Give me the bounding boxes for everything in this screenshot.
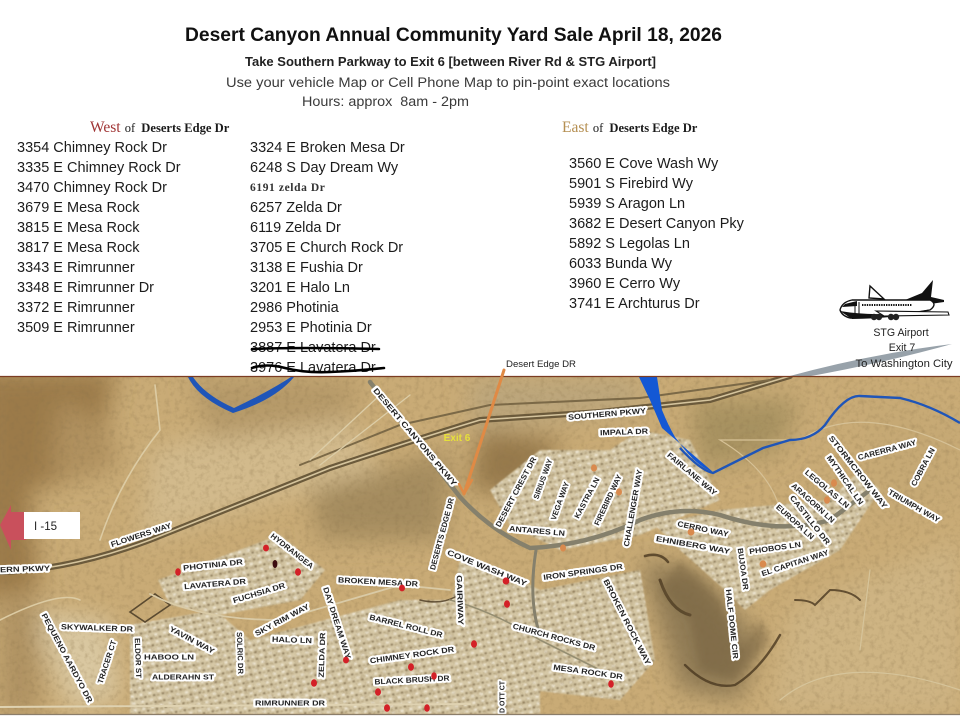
address list: west column 1	[17, 140, 181, 336]
airport label: Exit 7	[889, 342, 915, 354]
street labels: ZELDA DR	[317, 632, 327, 678]
address list: west column 2: 6119 Zelda Dr	[250, 220, 341, 236]
heading: west of Deserts Edge Dr: West of Deserts Edge Dr	[90, 119, 230, 136]
road: Desert Canyons Parkway	[0, 382, 960, 707]
street labels: TRACER CT	[96, 639, 118, 685]
street labels: RIMRUNNER DR	[255, 698, 326, 708]
address list: east: 5901 S Firebird Wy	[569, 176, 694, 192]
address list: west column 2: 6257 Zelda Dr	[250, 200, 342, 216]
street labels: CARERRA WAY	[857, 438, 917, 462]
street labels: ARAGORN LN	[790, 481, 836, 525]
street labels: FAIRLANE WAY	[665, 451, 719, 497]
address list: west column 1: 3343 E Rimrunner	[17, 260, 135, 276]
residential neighbourhoods	[130, 430, 880, 714]
airport label: To Washington City	[856, 358, 953, 370]
street labels: FUCHSIA DR	[232, 581, 287, 605]
street labels: HABOO LN	[144, 652, 194, 662]
street labels: STORMCROW WAY	[827, 434, 889, 510]
address list: west column 1: 3817 E Mesa Rock	[17, 240, 140, 256]
address list: west column 2: 3887 E Lavatera Dr	[250, 340, 376, 356]
address list: east: 3960 E Cerro Wy	[569, 276, 681, 292]
street labels: DAY DREAM WAY	[321, 586, 353, 660]
address list: east	[569, 156, 745, 312]
strike-through: cancelled addresses	[252, 348, 384, 372]
street labels: CHIMNEY ROCK DR	[369, 645, 455, 665]
address list: west column 1: 3348 E Rimrunner Dr	[17, 280, 154, 296]
arrow: Desert Edge DR to Exit 6	[459, 370, 504, 494]
address list: east: 3741 E Archturus Dr	[569, 296, 700, 312]
street labels: MESA ROCK DR	[553, 663, 624, 681]
address list: west column 1: 3509 E Rimrunner	[17, 320, 135, 336]
street labels: EUROPA LN	[774, 503, 816, 541]
street labels: BLACK BRUSH DR	[374, 674, 450, 686]
street labels: FIREBIRD WAY	[592, 473, 624, 527]
address list: east: 6033 Bunda Wy	[569, 256, 673, 272]
address list: west column 2: 2986 Photinia	[250, 300, 340, 316]
street labels: IMPALA DR	[600, 427, 649, 437]
address list: west column 2: 6248 S Day Dream Wy	[250, 160, 399, 176]
rim ridges	[420, 555, 860, 686]
street labels: SOLRIC DR	[235, 632, 245, 675]
street labels: CASTILLO DR	[788, 494, 832, 547]
street labels: LEGOLAS LN	[803, 468, 851, 510]
icon: airplane	[840, 280, 949, 320]
map border	[0, 376, 960, 378]
street labels: DESERT CREST DR	[494, 455, 539, 529]
address list: east: 3682 E Desert Canyon Pky	[569, 216, 745, 232]
airport label: STG Airport	[873, 327, 929, 339]
street labels: SOUTHERN PKWY	[568, 406, 646, 422]
callout: I-15 direction: I -15	[34, 521, 57, 533]
street labels: SKYWALKER DR	[61, 622, 134, 634]
address list: east: 5892 S Legolas Ln	[569, 236, 690, 252]
highway: Southern Parkway	[0, 376, 790, 572]
street labels: DESERTS EDGE DR	[428, 497, 456, 571]
street labels: COBRA LN	[909, 446, 937, 488]
street labels: MYTHICAL LN	[825, 454, 865, 506]
address list: west column 2: 3324 E Broken Mesa Dr	[250, 140, 405, 156]
callout: Desert Edge DR label: Desert Edge DR	[506, 359, 576, 369]
street labels: HALO LN	[272, 635, 312, 645]
orange markers: east sales	[560, 464, 837, 568]
address list: west column 2: 3201 E Halo Ln	[250, 280, 350, 296]
street labels: BARREL ROLL DR	[369, 613, 444, 640]
street labels: EHNIBERG WAY	[655, 534, 731, 556]
street labels: GAIRIWAY	[455, 575, 465, 625]
address list: west column 1: 3335 E Chimney Rock Dr	[17, 160, 181, 176]
address list: west column 1: 3815 E Mesa Rock	[17, 220, 140, 236]
address list: east: 3560 E Cove Wash Wy	[569, 156, 719, 172]
map instructions line: Use your vehicle Map or Cell Phone Map to pin-point exact locations	[226, 75, 670, 90]
street labels: PHOTINIA DR	[183, 557, 244, 573]
address list: west column 1: 3372 E Rimrunner	[17, 300, 135, 316]
street labels: VEGA WAY	[549, 481, 571, 521]
street labels: DESERT CANYONS PKWY	[371, 386, 459, 488]
street labels: TRIUMPH WAY	[887, 488, 941, 524]
street labels: CHALLENGER WAY	[622, 469, 644, 547]
street labels: CERRO WAY	[677, 519, 729, 539]
title: Desert Canyon Annual Community Yard Sale April 18, 2026	[185, 25, 722, 46]
directions line: Take Southern Parkway to Exit 6 [between River Rd & STG Airport]	[245, 55, 656, 69]
address list: west column 1: 3679 E Mesa Rock	[17, 200, 140, 216]
street labels: EL CAPITAN WAY	[760, 548, 830, 578]
airport label	[856, 327, 953, 370]
street labels: PEQUENO AARDYO DR	[40, 612, 95, 705]
road label: Exit 6: Exit 6	[444, 433, 471, 444]
street labels: COVE WASH WAY	[446, 548, 528, 588]
street labels: SIRIUS WAY	[532, 458, 554, 500]
heading: east of Deserts Edge Dr: East of Deserts Edge Dr	[562, 119, 698, 136]
street labels: YAVIN WAY	[168, 624, 216, 656]
aerial map	[0, 370, 960, 714]
street labels: KASTRA LN	[572, 476, 602, 520]
street labels	[0, 386, 941, 713]
street labels: D OTT CT	[498, 681, 506, 713]
red markers: west sales	[175, 545, 614, 712]
address list: east: 5939 S Aragon Ln	[569, 196, 685, 212]
street labels: ERN PKWY	[0, 564, 50, 574]
noise texture	[0, 377, 960, 714]
river: left bend	[188, 377, 294, 413]
street labels: SKY RIM WAY	[253, 602, 311, 638]
address list: west column 1: 3470 Chimney Rock Dr	[17, 180, 167, 196]
street labels: HALF DOME CIR	[724, 589, 740, 660]
street labels: CHURCH ROCKS DR	[512, 622, 597, 652]
street labels: ELDOR ST	[133, 638, 143, 679]
hours line: Hours: approx 8am - 2pm	[302, 94, 469, 109]
address list: west column 2: 3976 E Lavatera Dr	[250, 360, 376, 376]
street labels: FLOWERS WAY	[110, 521, 172, 549]
street labels: BROKEN ROCK WAY	[601, 578, 653, 666]
address list: west column 2: 2953 E Photinia Dr	[250, 320, 372, 336]
street labels: ALDERAHN ST	[152, 672, 214, 682]
street labels: IRON SPRINGS DR	[543, 562, 624, 582]
address list: west column 2: 3705 E Church Rock Dr	[250, 240, 403, 256]
address list: west column 2: 3138 E Fushia Dr	[250, 260, 363, 276]
street labels: BUJOA DR	[736, 548, 750, 591]
callout: I-15 direction	[0, 505, 80, 550]
address list: west column 1: 3354 Chimney Rock Dr	[17, 140, 167, 156]
address list: west column 2: 6191 zelda Dr	[250, 182, 326, 194]
street labels: PHOBOS LN	[749, 540, 801, 556]
terrain background	[0, 370, 960, 714]
street labels: LAVATERA DR	[184, 577, 247, 591]
street labels: HYDRANGEA	[269, 531, 316, 571]
arrow: to Exit 7 airport	[786, 344, 952, 378]
address list: west column 2	[250, 140, 405, 376]
street labels: BROKEN MESA DR	[338, 575, 419, 589]
river: right channel	[639, 377, 960, 473]
street labels: ANTARES LN	[509, 524, 565, 538]
